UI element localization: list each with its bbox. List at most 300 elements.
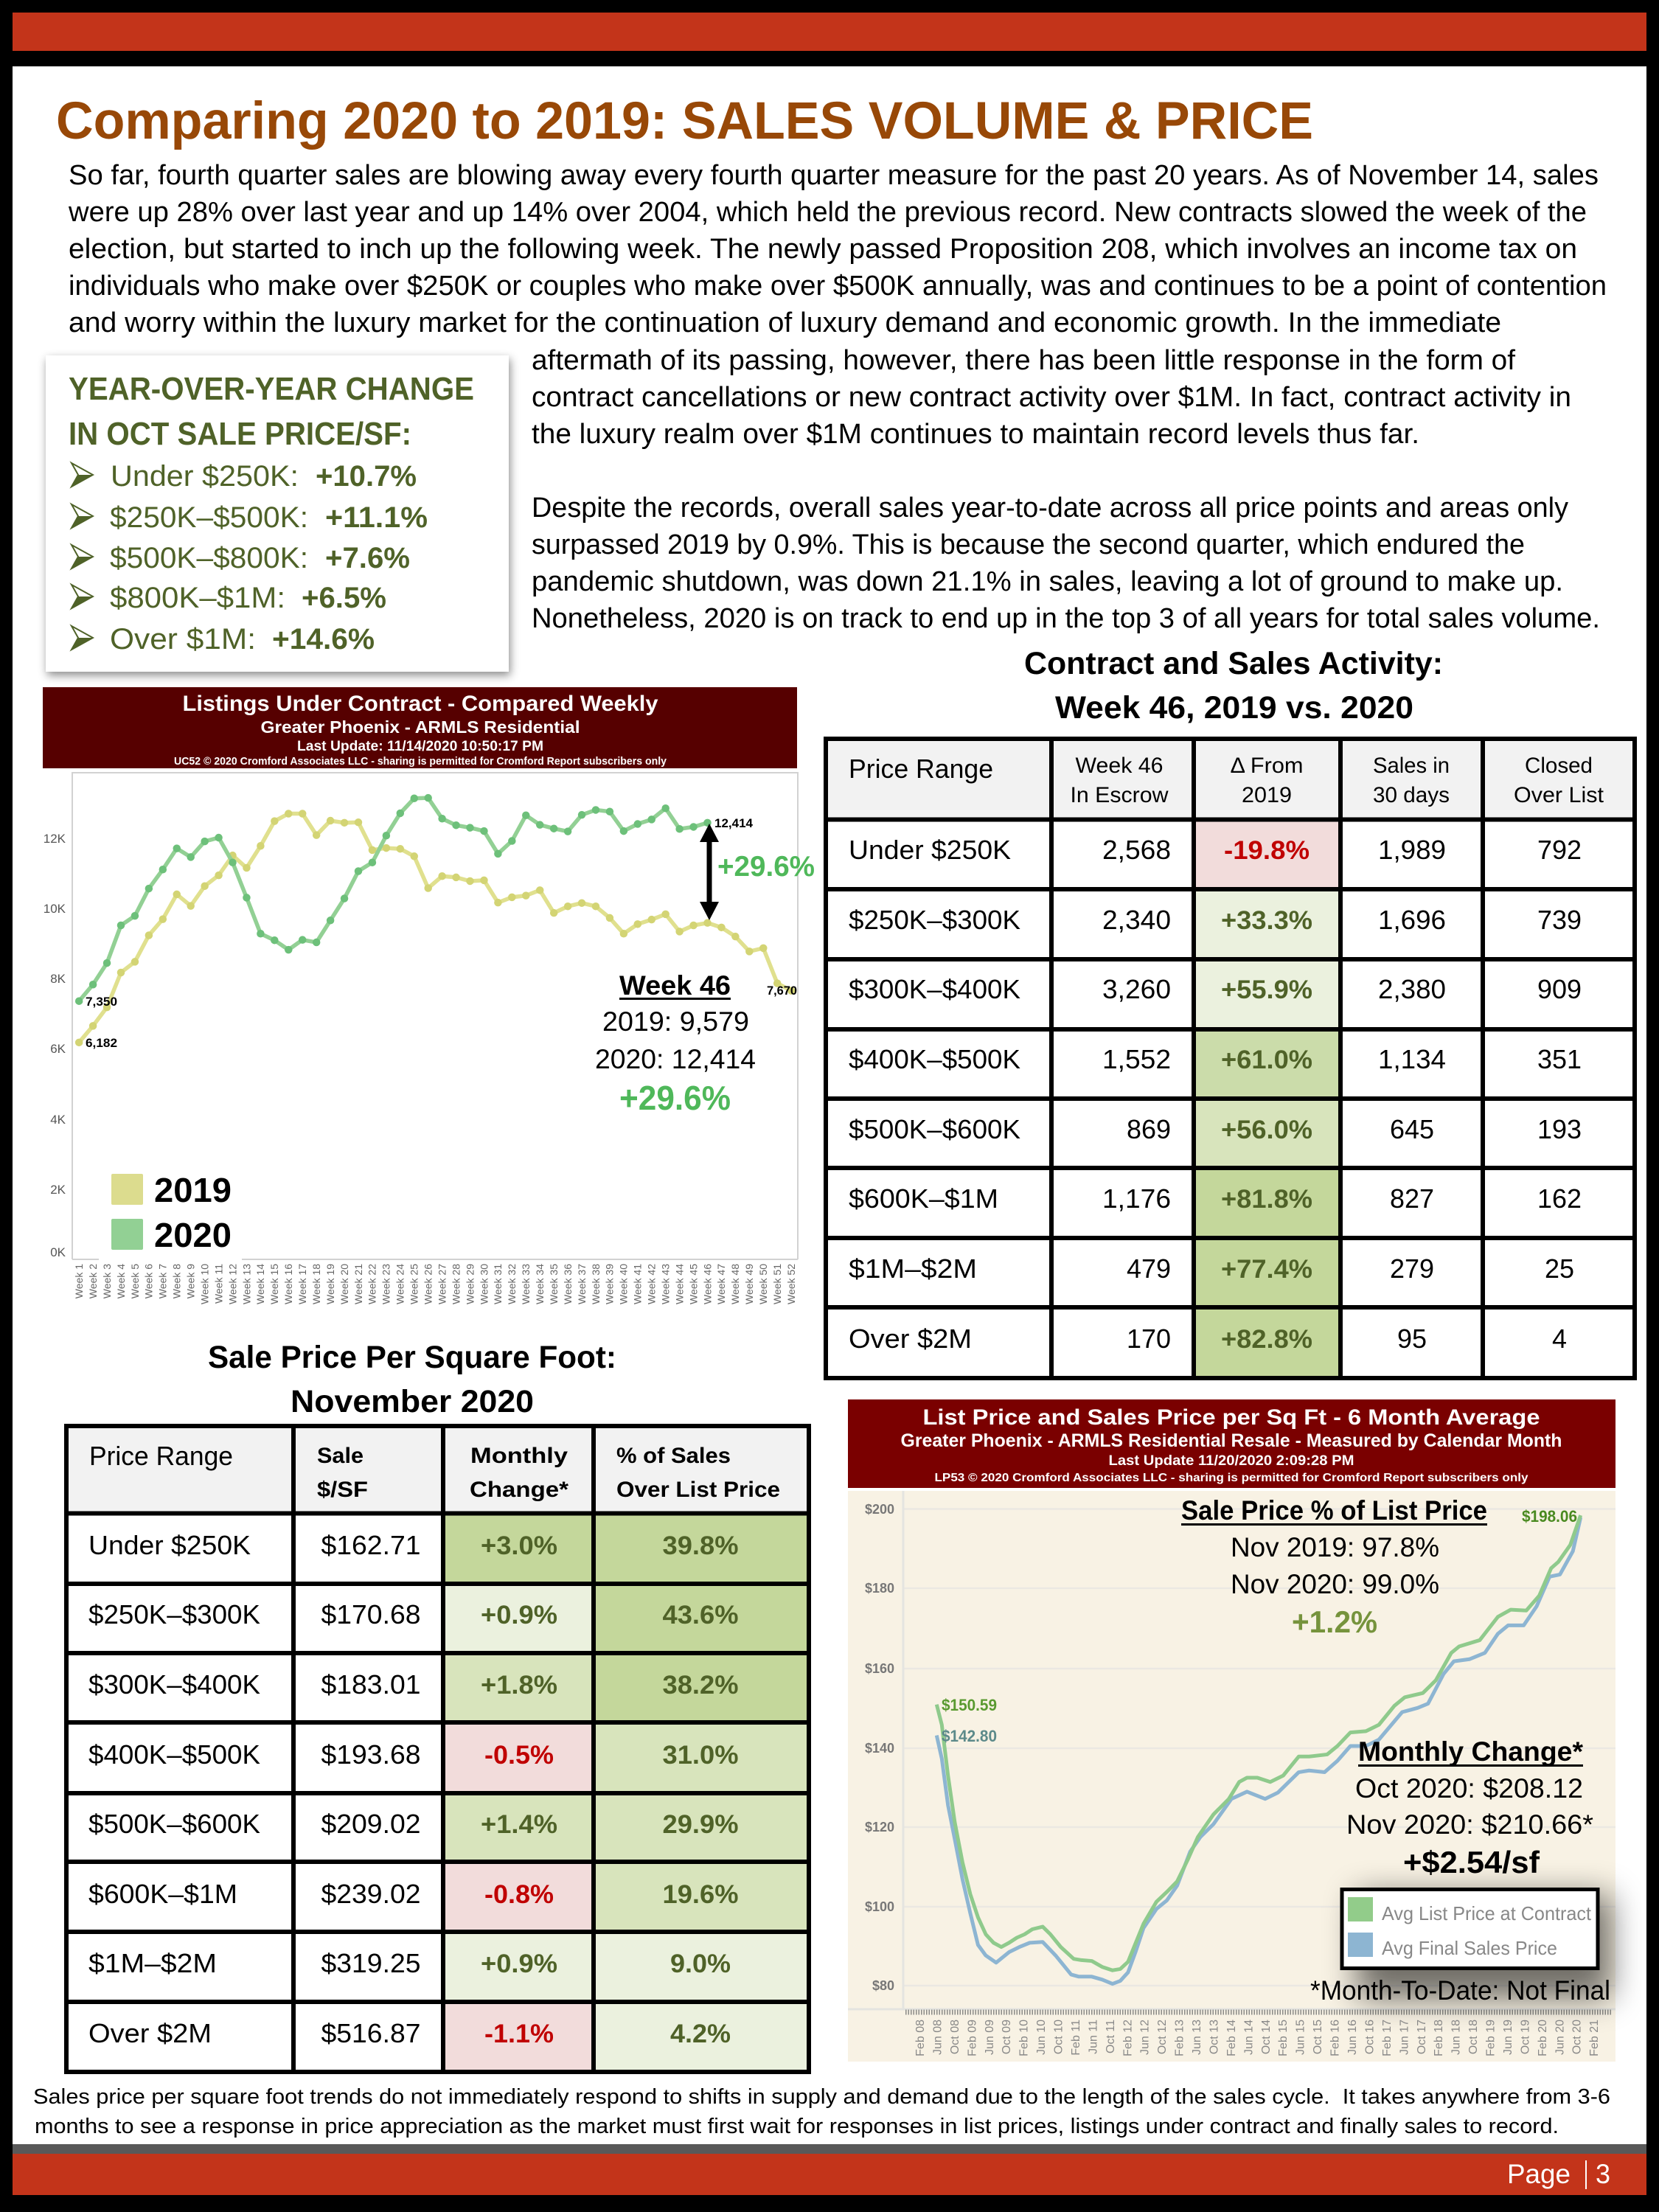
header labels: Over List Price: [616, 1478, 780, 1502]
data labels: 6,182: [86, 1036, 117, 1050]
row: 600K-1M: -0.8%: [484, 1880, 554, 1909]
row: 300K-400K: +55.9%: [1221, 975, 1312, 1004]
x axis month labels: Jun 11: [1087, 2020, 1099, 2054]
row: under 250K: 792: [1537, 835, 1582, 865]
header row fill: [66, 1426, 809, 1513]
x axis week labels: Week 43: [659, 1264, 671, 1304]
x axis week labels: Week 38: [590, 1264, 602, 1304]
row: over 2M: [88, 2018, 731, 2048]
chart header: [43, 687, 797, 768]
row: 400K-500K: $193.68: [321, 1739, 420, 1770]
line series 2020: [79, 798, 708, 1001]
second paragraph: [532, 493, 1600, 634]
x axis month labels: Feb 09: [966, 2020, 978, 2056]
row: 500K-600K: +1.4%: [481, 1810, 557, 1839]
row: 300K-400K: 909: [1537, 974, 1582, 1004]
x axis week labels: Week 51: [771, 1264, 783, 1304]
row: 500K-600K: 869: [1127, 1114, 1171, 1144]
row: 300K-400K: +1.8%: [481, 1671, 557, 1700]
y axis labels: 12K: [44, 832, 66, 846]
page number: Page: [1507, 2159, 1571, 2189]
header labels: Change*: [470, 1478, 568, 1502]
row: over 2M: +82.8%: [1221, 1325, 1312, 1354]
x axis month labels: Feb 20: [1537, 2020, 1549, 2056]
x axis month labels: Jun 14: [1242, 2020, 1255, 2055]
x axis month labels: Oct 20: [1571, 2020, 1584, 2054]
annotation: monthly change: Nov 2020: $210.66*: [1346, 1809, 1593, 1840]
x axis week labels: Week 40: [618, 1264, 630, 1304]
x axis week labels: Week 52: [785, 1264, 797, 1304]
x axis week labels: Week 12: [226, 1264, 238, 1304]
header labels: Monthly: [470, 1444, 568, 1468]
x axis month labels: Oct 19: [1519, 2020, 1531, 2054]
header labels: Week 46: [1075, 754, 1164, 778]
x axis week labels: Week 34: [534, 1264, 546, 1304]
intro text block: contract cancellations or new contract activity over $1M. In fact, contract activity in: [532, 382, 1571, 413]
row: 300K-400K: $183.01: [321, 1669, 420, 1700]
row: under 250K: Under $250K: [849, 835, 1011, 865]
y axis labels: $160: [865, 1661, 894, 1676]
row: 400K-500K: 1,552: [1102, 1044, 1171, 1074]
x axis month labels: Jun 20: [1554, 2020, 1566, 2055]
row: 500K-600K: 29.9%: [662, 1810, 739, 1839]
week 46 annotation: 2019: 9,579: [602, 1006, 749, 1037]
x axis week labels: Week 10: [199, 1264, 211, 1304]
x axis week labels: Week 14: [254, 1264, 266, 1304]
x axis week labels: Week 24: [394, 1264, 406, 1304]
row: 400K-500K: -0.5%: [484, 1741, 554, 1770]
x axis week labels: Week 47: [715, 1264, 727, 1304]
annotation: monthly change: Oct 2020: $208.12: [1355, 1773, 1583, 1804]
header row fill: [826, 739, 1635, 820]
x axis week labels: Week 17: [296, 1264, 308, 1304]
row: 600K-1M: $239.02: [321, 1879, 420, 1909]
x axis month labels: Oct 17: [1416, 2020, 1428, 2054]
month-to-date note: *Month-To-Date: Not Final: [1310, 1975, 1610, 2006]
x axis month labels: Feb 21: [1588, 2020, 1601, 2056]
row: 1M-2M: 25: [1545, 1253, 1574, 1284]
header labels: Sales in: [1373, 754, 1450, 778]
x axis week labels: Week 21: [352, 1264, 364, 1304]
intro text block: election, but started to inch up the following week. The newly passed Proposition 208, which involves an income tax on: [69, 234, 1577, 265]
annotation: sale price percent of list price: +1.2%: [1292, 1604, 1377, 1639]
header labels: [849, 754, 1604, 807]
x axis month labels: Feb 13: [1174, 2020, 1186, 2056]
list item: over 1M: [72, 623, 375, 655]
x axis week labels: Week 13: [240, 1264, 252, 1304]
row: under 250K: 2,568: [1102, 835, 1171, 865]
intro text block: were up 28% over last year and up 14% over 2004, which held the previous record. New contracts slowed the week of the: [68, 197, 1587, 228]
page number: 3: [1596, 2159, 1610, 2189]
list item: over 1M: +14.6%: [272, 623, 375, 655]
line series 2019: [79, 814, 791, 1043]
legend: [111, 1171, 232, 1254]
page number: [1507, 2159, 1610, 2189]
data labels: 7,350: [86, 995, 117, 1009]
row: over 2M: Over $2M: [849, 1324, 972, 1354]
bottom gray band: [13, 2144, 1646, 2154]
row: 400K-500K: $400K–$500K: [849, 1044, 1020, 1074]
annotation: monthly change: [1346, 1736, 1593, 1879]
row: 1M-2M: $1M–$2M: [88, 1948, 217, 1978]
row: under 250K: 39.8%: [662, 1531, 739, 1560]
legend: 2020: [154, 1216, 232, 1254]
row: 500K-600K: [88, 1809, 739, 1839]
x axis week labels: Week 2: [87, 1264, 99, 1298]
x axis week labels: Week 1: [73, 1264, 85, 1298]
footnote: Sales price per square foot trends do not immediately respond to shifts in supply and demand due to the length of the sales cycle. It takes anywhere from 3-6: [33, 2085, 1610, 2109]
row: 250K-300K: +0.9%: [481, 1601, 557, 1630]
x axis week labels: Week 30: [478, 1264, 490, 1304]
row: 500K-600K: +56.0%: [1221, 1116, 1312, 1144]
y axis labels: 6K: [50, 1042, 66, 1056]
row: under 250K: +3.0%: [481, 1531, 557, 1560]
callout heading: [69, 371, 474, 452]
x axis month labels: Feb 18: [1433, 2020, 1445, 2056]
x axis week labels: Week 28: [450, 1264, 462, 1304]
bottom red band: [13, 2154, 1646, 2195]
row: 1M-2M: +77.4%: [1221, 1255, 1312, 1284]
panel: list price and sales price chart: [848, 1399, 1615, 2062]
x axis month labels: Jun 19: [1502, 2020, 1514, 2055]
row: 500K-600K: $209.02: [321, 1809, 420, 1839]
y axis labels: 0K: [50, 1245, 66, 1259]
x axis week labels: Week 23: [380, 1264, 392, 1304]
header labels: Closed: [1525, 754, 1593, 778]
x axis week labels: Week 35: [548, 1264, 560, 1304]
x axis week labels: Week 20: [338, 1264, 350, 1304]
chart header: Last Update 11/20/2020 2:09:28 PM: [1109, 1453, 1354, 1469]
row: 1M-2M: 9.0%: [670, 1950, 731, 1978]
x axis week labels: Week 25: [408, 1264, 420, 1304]
list item: 500K-800K: +7.6%: [325, 542, 410, 574]
row: 1M-2M: 279: [1390, 1253, 1434, 1284]
x axis month labels: Feb 11: [1070, 2020, 1082, 2056]
row: 300K-400K: $300K–$400K: [849, 974, 1020, 1004]
chart header: List Price and Sales Price per Sq Ft - 6 Month Average: [923, 1405, 1540, 1430]
row: 1M-2M: [88, 1948, 731, 1978]
row: 300K-400K: [849, 974, 1582, 1004]
list item: 800K-1M: $800K–$1M:: [110, 582, 285, 614]
intro text block: and worry within the luxury market for the continuation of luxury demand and economic growth. In the immediate: [69, 307, 1501, 338]
header labels: Price Range: [849, 754, 993, 784]
list item: under 250K: +10.7%: [316, 460, 417, 493]
row: 250K-300K: $250K–$300K: [88, 1599, 260, 1630]
row: under 250K: -19.8%: [1224, 836, 1310, 865]
row: 400K-500K: 1,134: [1378, 1044, 1446, 1074]
x axis month labels: Oct 14: [1260, 2020, 1273, 2054]
row: 600K-1M: 162: [1537, 1183, 1582, 1214]
x axis week labels: Week 49: [743, 1264, 755, 1304]
week 46 annotation: [595, 970, 756, 1117]
x axis month labels: Feb 19: [1485, 2020, 1497, 2056]
chart header: Last Update: 11/14/2020 10:50:17 PM: [297, 739, 543, 754]
monthly change fills: [443, 1513, 594, 2072]
row: 600K-1M: [88, 1879, 739, 1909]
list item: under 250K: Under $250K:: [111, 460, 299, 493]
x axis month labels: Oct 09: [1001, 2020, 1013, 2054]
callout heading: IN OCT SALE PRICE/SF:: [69, 416, 411, 452]
row: 500K-600K: 645: [1390, 1114, 1434, 1144]
plot area and axes: [72, 773, 798, 1259]
legend: Avg Final Sales Price: [1382, 1937, 1557, 1959]
row: 400K-500K: [88, 1739, 739, 1770]
line: avg final sales price: [936, 1517, 1581, 1984]
row: under 250K: Under $250K: [88, 1530, 251, 1560]
row: 600K-1M: 1,176: [1102, 1183, 1171, 1214]
x axis week labels: Week 42: [646, 1264, 658, 1304]
row: under 250K: 1,989: [1378, 835, 1446, 865]
x axis month labels: Jun 18: [1450, 2020, 1463, 2055]
x axis week labels: Week 50: [757, 1264, 769, 1304]
row: 500K-600K: $500K–$600K: [88, 1809, 260, 1839]
header labels: $/SF: [317, 1478, 368, 1502]
row: 250K-300K: [849, 905, 1582, 935]
row: 400K-500K: 31.0%: [662, 1741, 739, 1770]
chart header: Listings Under Contract - Compared Weekly: [183, 692, 658, 716]
callout heading: YEAR-OVER-YEAR CHANGE: [69, 371, 474, 407]
row: 600K-1M: 827: [1390, 1183, 1434, 1214]
table grid: [66, 1426, 809, 2072]
y axis labels: 10K: [44, 902, 66, 916]
x axis week labels: Week 41: [632, 1264, 644, 1304]
x axis week labels: Week 11: [212, 1264, 224, 1304]
x axis month labels: Feb 15: [1277, 2020, 1290, 2056]
intro text block: [68, 160, 1607, 450]
row: 400K-500K: +61.0%: [1221, 1046, 1312, 1074]
grid and axes: [848, 1491, 1615, 2012]
row: 250K-300K: [88, 1599, 739, 1630]
x axis week labels: Week 45: [687, 1264, 699, 1304]
data labels: $142.80: [942, 1727, 997, 1745]
x axis month labels: Feb 16: [1329, 2020, 1342, 2056]
row: over 2M: [849, 1324, 1567, 1354]
heading: contract and sales activity: Contract and Sales Activity:: [1024, 646, 1443, 681]
row: 1M-2M: $319.25: [321, 1948, 420, 1978]
x axis week labels: Week 16: [282, 1264, 294, 1304]
x axis month labels: Oct 10: [1053, 2020, 1065, 2054]
row: 250K-300K: +33.3%: [1221, 906, 1312, 935]
table: contract and sales activity: [826, 739, 1635, 1378]
y axis labels: $100: [865, 1899, 894, 1914]
x axis week labels: Week 27: [436, 1264, 448, 1304]
footnote: months to see a response in price appreciation as the market must first wait for responses in list prices, listings under contract and finally sales to record.: [35, 2115, 1559, 2138]
heading: sale price per square foot: [208, 1340, 616, 1419]
row: 500K-600K: [849, 1114, 1582, 1144]
annotation: sale price percent of list price: Nov 2019: 97.8%: [1231, 1532, 1439, 1562]
annotation: sale price percent of list price: [1181, 1495, 1487, 1639]
x axis month labels: [914, 2020, 1601, 2056]
row: 1M-2M: $1M–$2M: [849, 1253, 977, 1284]
x axis month labels: Feb 10: [1018, 2020, 1031, 2056]
x axis month labels: Feb 17: [1381, 2020, 1394, 2056]
row: 1M-2M: [849, 1253, 1574, 1284]
week 46 annotation: 2020: 12,414: [595, 1044, 756, 1074]
row: 250K-300K: 739: [1537, 905, 1582, 935]
row: 400K-500K: $400K–$500K: [88, 1739, 260, 1770]
row: 600K-1M: $600K–$1M: [88, 1879, 237, 1909]
chart background: [848, 1491, 1615, 2062]
row: over 2M: 4.2%: [670, 2020, 731, 2048]
y axis labels: $120: [865, 1820, 894, 1834]
row: 600K-1M: $600K–$1M: [849, 1183, 998, 1214]
header labels: 30 days: [1373, 783, 1450, 807]
row: under 250K: [849, 835, 1582, 865]
row: 600K-1M: [849, 1183, 1582, 1214]
row: 250K-300K: $170.68: [321, 1599, 420, 1630]
row: 250K-300K: 1,696: [1378, 905, 1446, 935]
line: avg list price at contract: [936, 1515, 1581, 1970]
y axis labels: 2K: [50, 1183, 66, 1197]
chart header: Greater Phoenix - ARMLS Residential: [261, 717, 580, 737]
x axis month labels: Oct 16: [1363, 2020, 1376, 2054]
y axis labels: [865, 1502, 894, 1993]
y axis labels: $140: [865, 1741, 894, 1756]
y axis labels: 8K: [50, 972, 66, 986]
annotation: monthly change: Monthly Change*: [1358, 1736, 1584, 1767]
row: over 2M: $516.87: [321, 2018, 420, 2048]
row: over 2M: -1.1%: [484, 2020, 554, 2048]
x axis month labels: Oct 11: [1105, 2020, 1117, 2053]
header labels: 2019: [1242, 783, 1292, 807]
row: 250K-300K: 43.6%: [662, 1601, 739, 1630]
x axis week labels: Week 19: [324, 1264, 336, 1304]
x axis week labels: Week 8: [171, 1264, 183, 1298]
intro text block: the luxury realm over $1M continues to maintain record levels thus far.: [532, 419, 1419, 450]
week 46 annotation: +29.6%: [619, 1079, 731, 1117]
x axis month labels: Oct 18: [1467, 2020, 1480, 2054]
row: under 250K: $162.71: [321, 1530, 420, 1560]
header labels: Over List: [1514, 783, 1604, 807]
x axis week labels: Week 9: [184, 1264, 196, 1298]
table grid: [826, 739, 1635, 1378]
second paragraph: Nonetheless, 2020 is on track to end up in the top 3 of all years for total sales volume.: [532, 603, 1600, 634]
data labels: [86, 816, 797, 1050]
x axis week labels: Week 33: [520, 1264, 532, 1304]
x axis week labels: Week 32: [506, 1264, 518, 1304]
heading: sale price per square foot: Sale Price Per Square Foot:: [208, 1340, 616, 1375]
chart header: Greater Phoenix - ARMLS Residential Resale - Measured by Calendar Month: [901, 1430, 1562, 1451]
x axis month labels: Feb 08: [914, 2020, 927, 2056]
data labels: $150.59: [942, 1696, 997, 1714]
week 46 annotation: Week 46: [619, 970, 731, 1001]
intro text block: individuals who make over $250K or couples who make over $500K annually, was and continues to be a point of contention: [69, 271, 1607, 302]
legend: 2019: [154, 1171, 232, 1209]
x axis month labels: Jun 13: [1191, 2020, 1203, 2055]
header labels: Sale: [317, 1444, 364, 1468]
percent over list fills: [594, 1513, 809, 2072]
y axis labels: [44, 832, 66, 1259]
x axis week labels: Week 37: [576, 1264, 588, 1304]
list item: 250K-500K: $250K–$500K:: [110, 501, 308, 534]
legend shadow: [1357, 1895, 1611, 1998]
data labels: 7,670: [767, 984, 797, 998]
x axis week labels: Week 48: [729, 1264, 741, 1304]
row: 300K-400K: 38.2%: [662, 1671, 739, 1700]
row: 500K-600K: 193: [1537, 1114, 1582, 1144]
x axis week labels: Week 15: [268, 1264, 280, 1304]
list item: 800K-1M: +6.5%: [302, 582, 386, 614]
x axis week labels: Week 7: [157, 1264, 169, 1298]
y axis labels: 4K: [50, 1113, 66, 1127]
x axis week labels: Week 22: [366, 1264, 378, 1304]
data labels: 12,414: [714, 816, 754, 830]
y axis labels: $80: [872, 1978, 894, 1993]
row: 400K-500K: [849, 1044, 1582, 1074]
legend: [1342, 1889, 1598, 1969]
gap percent label: +29.6%: [717, 851, 815, 883]
row: 1M-2M: 479: [1127, 1253, 1171, 1284]
chart header: [848, 1399, 1615, 1488]
row: 400K-500K: 351: [1537, 1044, 1582, 1074]
x axis week labels: Week 18: [310, 1264, 322, 1304]
x axis month labels: Oct 15: [1312, 2020, 1324, 2054]
chart header: LP53 © 2020 Cromford Associates LLC - sharing is permitted for Cromford Report subscribers only: [935, 1472, 1528, 1484]
data labels: $198.06: [1522, 1507, 1577, 1526]
row: 600K-1M: +81.8%: [1221, 1185, 1312, 1214]
list item: 500K-800K: $500K–$800K:: [110, 542, 308, 574]
legend: Avg List Price at Contract: [1382, 1902, 1592, 1924]
row: 300K-400K: $300K–$400K: [88, 1669, 260, 1700]
heading: contract and sales activity: Week 46, 2019 vs. 2020: [1055, 690, 1413, 726]
list item: 250K-500K: [72, 501, 428, 534]
heading: sale price per square foot: November 2020: [291, 1384, 534, 1419]
x axis month labels: Oct 13: [1208, 2020, 1221, 2054]
y axis labels: $180: [865, 1581, 894, 1596]
chart header: UC52 © 2020 Cromford Associates LLC - sharing is permitted for Cromford Report subscribers only: [174, 755, 667, 768]
row: 600K-1M: 19.6%: [662, 1880, 739, 1909]
arrow: week 46 gap: [700, 824, 719, 920]
list item: 250K-500K: +11.1%: [325, 501, 428, 534]
x axis month labels: Jun 08: [932, 2020, 944, 2055]
data labels: [942, 1507, 1577, 1745]
x axis month labels: Jun 16: [1346, 2020, 1359, 2055]
row: 250K-300K: 2,340: [1102, 905, 1171, 935]
list item: over 1M: Over $1M:: [110, 623, 256, 655]
second paragraph: surpassed 2019 by 0.9%. This is because the second quarter, which endured the: [532, 529, 1525, 560]
annotation: sale price percent of list price: Nov 2020: 99.0%: [1231, 1569, 1439, 1599]
second paragraph: Despite the records, overall sales year-to-date across all price points and areas only: [532, 493, 1568, 524]
row: over 2M: 95: [1397, 1324, 1427, 1354]
x axis week labels: Week 44: [673, 1264, 685, 1304]
x axis week labels: Week 31: [492, 1264, 504, 1304]
header labels: Δ From: [1230, 754, 1304, 778]
row: over 2M: 170: [1127, 1324, 1171, 1354]
x axis month labels: Jun 17: [1398, 2020, 1411, 2055]
row: over 2M: 4: [1552, 1324, 1567, 1354]
row: 300K-400K: [88, 1669, 739, 1700]
x axis week labels: Week 36: [562, 1264, 574, 1304]
x axis month labels: Jun 12: [1139, 2020, 1152, 2055]
row: 1M-2M: +0.9%: [481, 1950, 557, 1978]
row: 300K-400K: 2,380: [1378, 974, 1446, 1004]
row: over 2M: Over $2M: [88, 2018, 212, 2048]
row: 300K-400K: 3,260: [1102, 974, 1171, 1004]
intro text block: aftermath of its passing, however, there has been little response in the form of: [532, 345, 1515, 376]
y axis labels: $200: [865, 1502, 894, 1517]
x axis month labels: Oct 12: [1156, 2020, 1169, 2054]
top red band: [13, 13, 1646, 51]
header labels: % of Sales: [616, 1444, 731, 1468]
second paragraph: pandemic shutdown, was down 21.1% in sales, leaving a lot of ground to make up.: [532, 566, 1563, 597]
x axis month labels: Jun 09: [984, 2020, 996, 2055]
header labels: Price Range: [89, 1441, 233, 1471]
intro text block: So far, fourth quarter sales are blowing away every fourth quarter measure for the past 20 years. As of November 14, sales: [69, 160, 1599, 191]
title: Comparing 2020 to 2019: SALES VOLUME & PRICE: [56, 92, 1313, 150]
x axis week labels: Week 26: [422, 1264, 434, 1304]
panel: year-over-year callout: [46, 355, 509, 672]
delta column fills: [1194, 820, 1340, 1378]
